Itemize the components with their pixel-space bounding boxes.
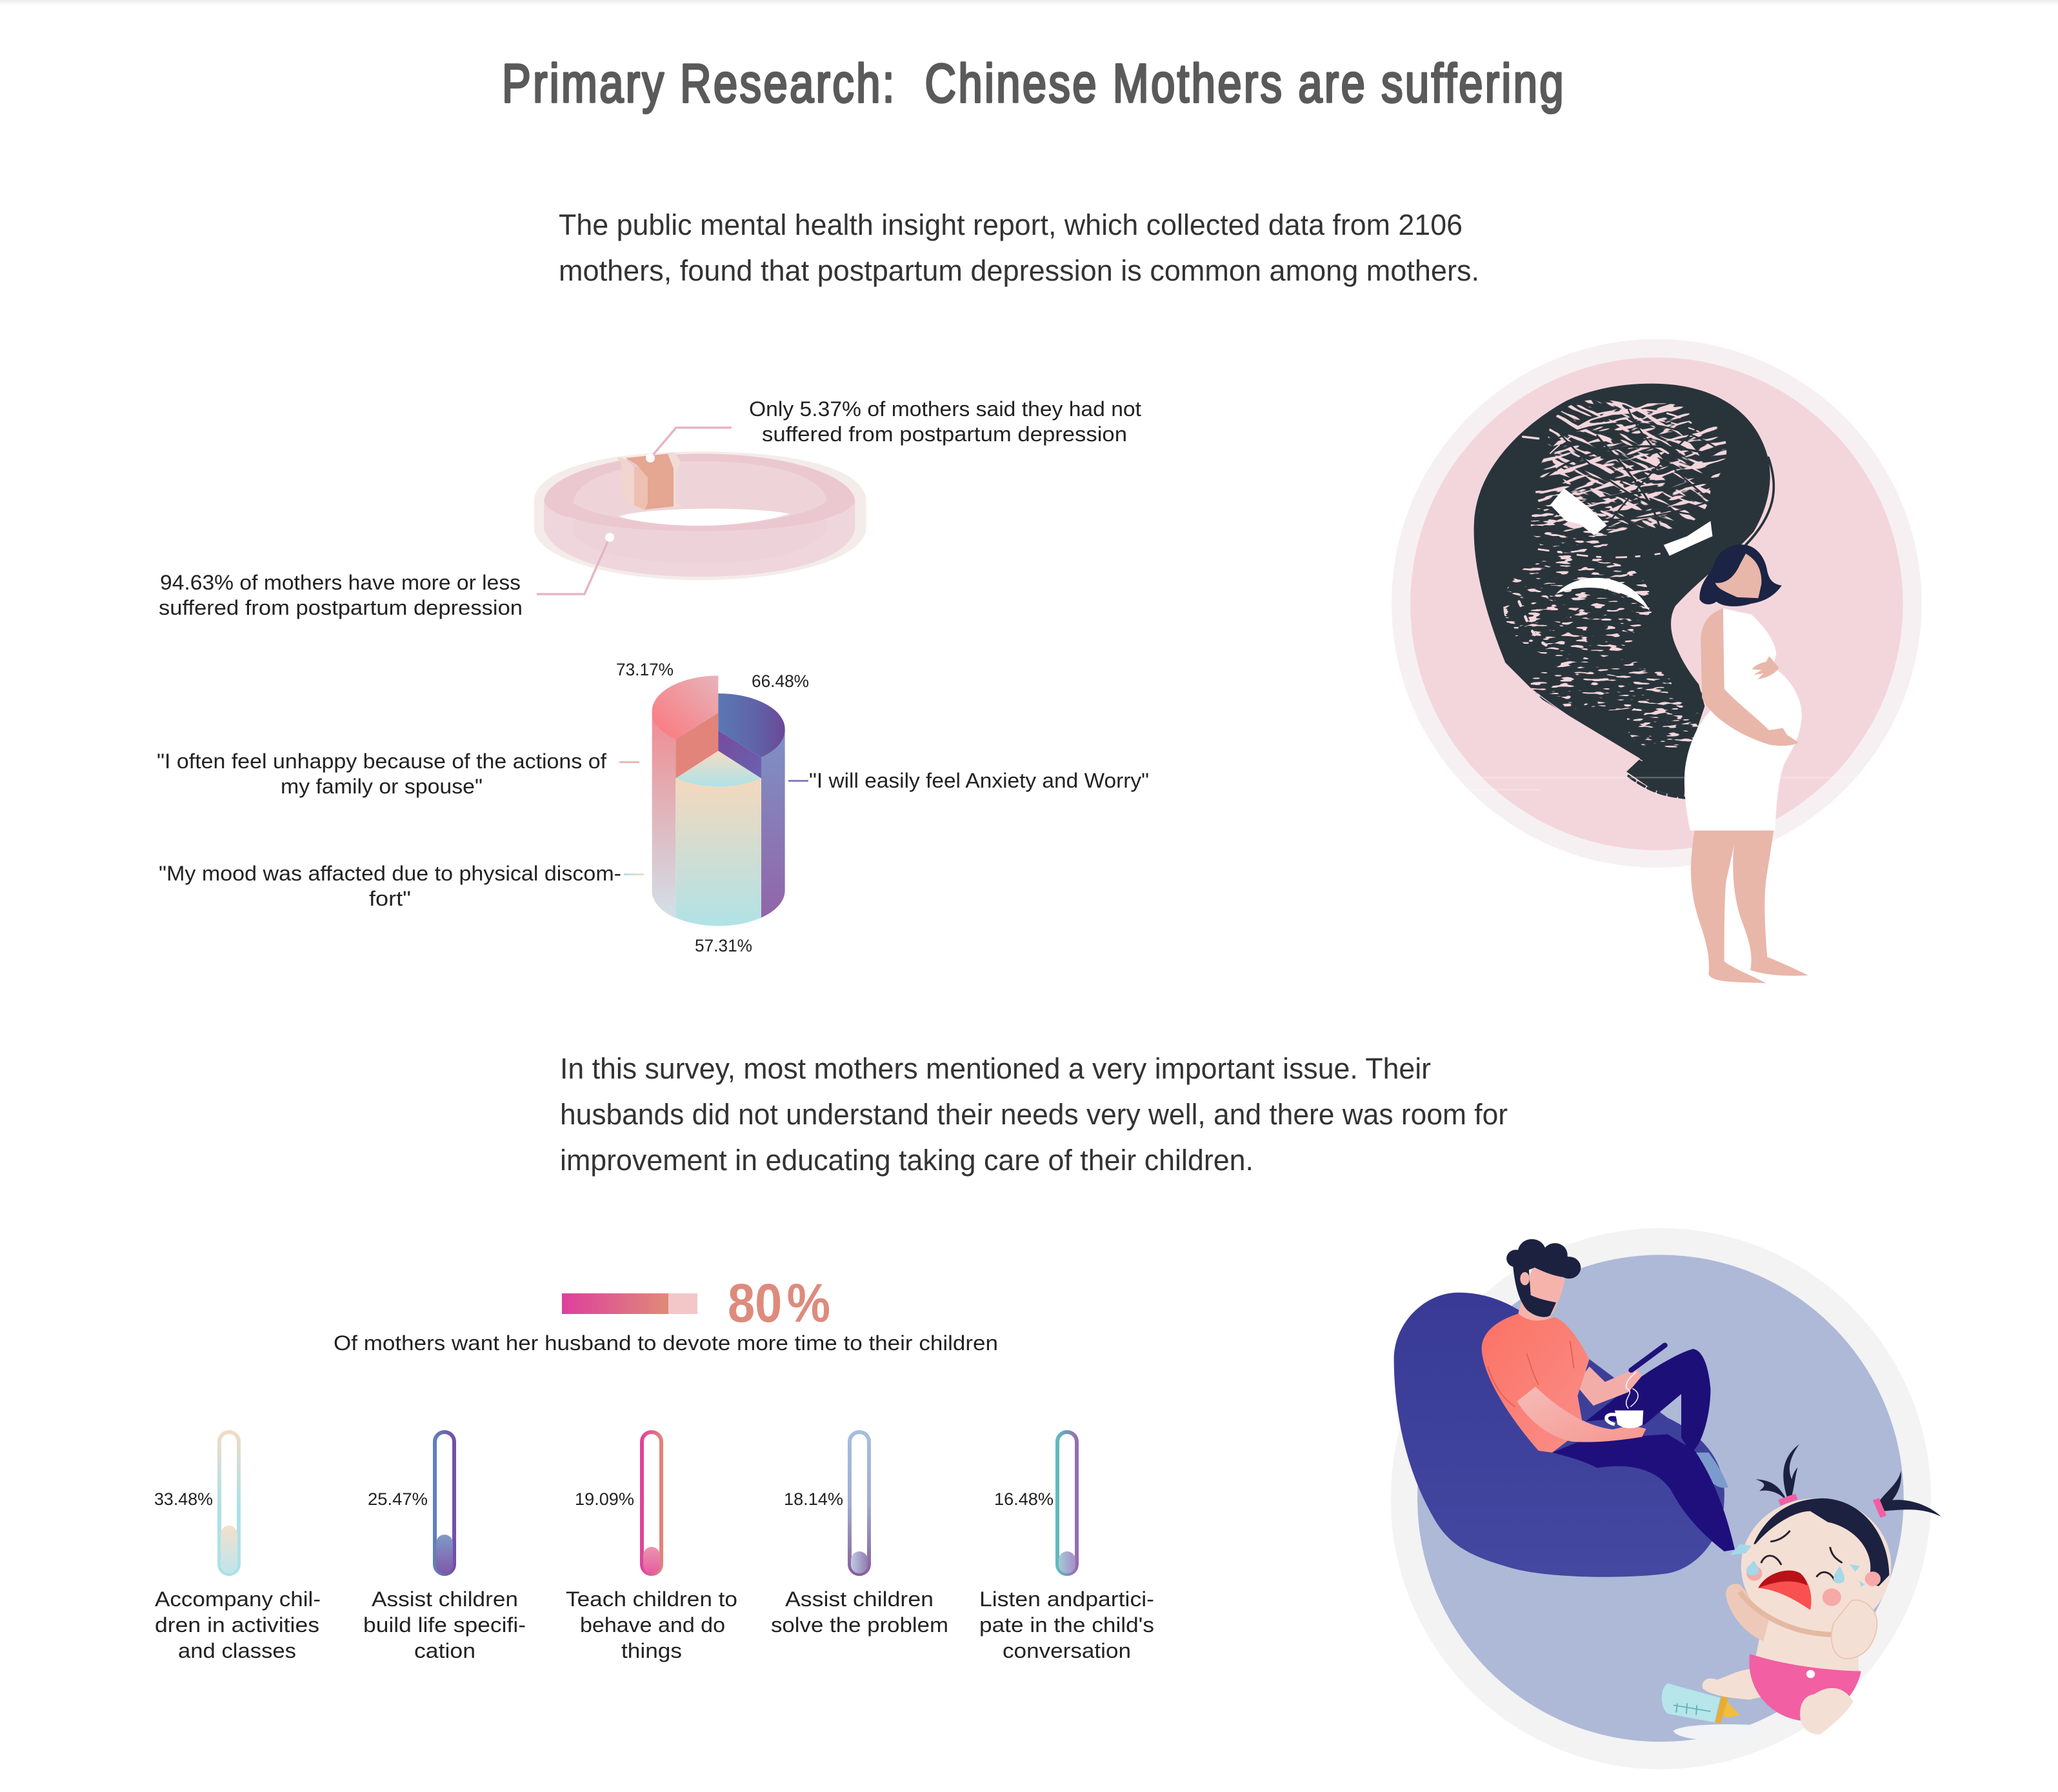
hair cap [1753, 1498, 1889, 1586]
scribble texture: upper crossing [1530, 373, 1728, 555]
thermometer: listen and participate: pate in the child's [979, 1613, 1154, 1637]
woman arm and torso skin [1701, 608, 1799, 746]
second paragraph: husbands did not understand their needs very well, and there was room for [560, 1098, 1508, 1131]
label: 5.37% [749, 397, 1141, 446]
woman dress [1684, 608, 1802, 831]
head [1741, 1498, 1891, 1634]
second paragraph [560, 1052, 1508, 1177]
eyes and brows [1761, 1531, 1841, 1580]
intro paragraph: The public mental health insight report, which collected data from 2106 [559, 208, 1463, 241]
thermometer: teach children: behave and do [580, 1613, 725, 1637]
label: 5.37%: Only 5.37% of mothers said they had not [749, 397, 1141, 421]
scribble strands [1511, 410, 1773, 798]
thermometer: accompany children: Accompany chil- [155, 1588, 321, 1611]
father [1482, 1239, 1735, 1551]
faint scan lines [1388, 777, 1937, 808]
illustration: pregnant woman with scribbled sad face [1388, 339, 1937, 983]
cylinder percentages: 57.31% [695, 936, 752, 955]
thermometer: listen and participate: 16.48% [994, 1489, 1054, 1509]
raised arm [1726, 1584, 1769, 1641]
highlighted ring slice [617, 453, 683, 510]
front leg [1800, 1688, 1853, 1735]
collar shadow [1740, 1591, 1832, 1635]
tears [1730, 1544, 1865, 1587]
neck and face [1518, 1268, 1565, 1320]
hair [1506, 1239, 1581, 1279]
label: 94.63%: 94.63% of mothers have more or less [160, 571, 521, 594]
thermometer: teach children: Teach children to [566, 1588, 737, 1611]
label: 94.63% [159, 571, 523, 619]
body [1753, 1619, 1859, 1678]
diaper [1749, 1654, 1861, 1720]
scribble texture: lower [1503, 488, 1701, 750]
thermometer: listen and participate: Listen andpartici- [979, 1588, 1154, 1611]
bottle [1662, 1683, 1740, 1724]
thermometer: life specification: cation [414, 1639, 475, 1662]
thermometer: accompany children: dren in activities [155, 1613, 319, 1637]
sad mouth [1556, 578, 1650, 612]
cylinder labels: my family or spouse" [281, 775, 483, 798]
thermometer: teach children: things [621, 1639, 682, 1662]
dark scribble head [1474, 384, 1770, 799]
thermometer: listen and participate: conversation [1003, 1639, 1131, 1662]
hair ties [1779, 1497, 1883, 1517]
blue segment [718, 693, 785, 918]
shirt sleeve lines [1488, 1341, 1573, 1407]
bent leg [1586, 1349, 1710, 1453]
shirt [1482, 1313, 1590, 1453]
leader: 5.37% [650, 428, 732, 458]
thermometer: listen and participate [979, 1432, 1154, 1662]
thermometer: solve the problem: 18.14% [784, 1489, 843, 1509]
thermometer: solve the problem: Assist children [785, 1588, 934, 1611]
steam [1626, 1372, 1638, 1409]
near arm [1517, 1387, 1646, 1442]
background circles [1391, 1228, 1931, 1769]
angry eyebrows [1550, 488, 1712, 556]
mug [1606, 1411, 1643, 1428]
cylinder leader lines [619, 761, 808, 875]
intro paragraph: mothers, found that postpartum depression is common among mothers. [559, 254, 1479, 287]
thermometer: accompany children [154, 1432, 321, 1662]
label: 94.63%: suffered from postpartum depression [159, 596, 523, 619]
80% figure: 80% [728, 1273, 830, 1333]
far foot [1691, 1453, 1728, 1488]
woman upper hand [1752, 656, 1779, 679]
beard and sideburn [1513, 1268, 1556, 1317]
80% caption: Of mothers want her husband to devote more time to their children [334, 1331, 998, 1355]
cylinder labels [157, 750, 1149, 910]
supporting hand [1832, 1600, 1877, 1658]
label: 5.37%: suffered from postpartum depression [762, 423, 1127, 446]
left pigtail [1755, 1444, 1799, 1499]
second paragraph: In this survey, most mothers mentioned a very important issue. Their [560, 1052, 1431, 1085]
cream segment [675, 751, 761, 926]
thermometer: life specification: 25.47% [368, 1489, 428, 1509]
thermometer: accompany children: 33.48% [154, 1489, 213, 1509]
thermometer: solve the problem [771, 1432, 948, 1637]
intro paragraph [559, 208, 1479, 287]
80% progress bar [562, 1293, 697, 1314]
near leg [1552, 1434, 1735, 1551]
thermometer: teach children: 19.09% [575, 1489, 634, 1509]
spilled milk [1673, 1724, 1766, 1740]
back leg [1703, 1669, 1765, 1700]
cylinder percentages [616, 660, 809, 955]
ring body [534, 452, 866, 580]
pink segment [652, 675, 718, 918]
right pigtail [1879, 1471, 1941, 1517]
woman legs [1691, 828, 1808, 983]
cylinder labels: "My mood was affacted due to physical discom- [159, 862, 621, 885]
cylinder labels: "I will easily feel Anxiety and Worry" [809, 769, 1149, 792]
cylinder labels: fort" [369, 887, 411, 910]
diaper button [1806, 1670, 1815, 1678]
ear [1520, 1272, 1530, 1285]
second paragraph: improvement in educating taking care of their children. [560, 1144, 1254, 1177]
cylinder labels: "I often feel unhappy because of the actions of [157, 750, 606, 773]
thermometer: solve the problem: solve the problem [771, 1613, 948, 1637]
cheeks [1746, 1566, 1881, 1606]
thermometer: life specification [363, 1432, 526, 1662]
beanbag chair [1394, 1293, 1724, 1577]
thermometer: life specification: Assist children [372, 1588, 518, 1611]
cylinder chart: mood statements [652, 675, 785, 926]
crying mouth [1758, 1571, 1812, 1610]
scribble texture: upper [1523, 383, 1739, 553]
illustration: father on beanbag ignoring crying baby [1391, 1228, 1941, 1769]
baby [1662, 1444, 1941, 1740]
scribble strokes [1503, 410, 1699, 761]
far arm [1575, 1366, 1642, 1406]
ring chart: postpartum depression share [534, 428, 866, 594]
cylinder percentages: 66.48% [752, 672, 809, 691]
title: Primary Research: Chinese Mothers are suffering [502, 54, 1564, 114]
thermometer: teach children [566, 1432, 737, 1662]
woman face [1715, 553, 1761, 598]
woman hair [1699, 544, 1782, 606]
cylinder percentages: 73.17% [616, 660, 674, 679]
phone [1631, 1345, 1665, 1370]
thermometer: life specification: build life specifi- [363, 1613, 526, 1637]
leader: 94.63% [537, 537, 610, 594]
thermometer: accompany children: and classes [178, 1639, 296, 1662]
background circles [1392, 339, 1922, 868]
